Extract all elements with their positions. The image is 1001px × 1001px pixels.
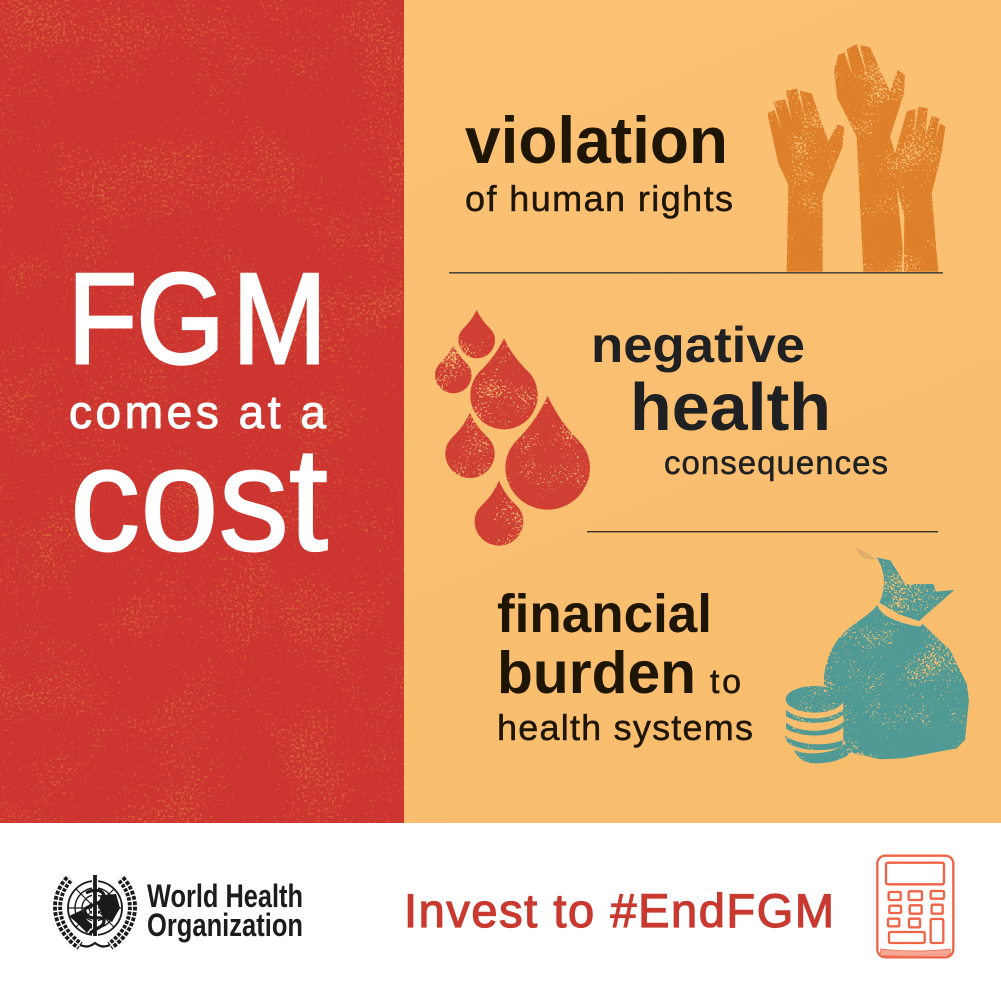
title: FGM comes at a cost: comes at a [69, 386, 326, 438]
logo: World Health Organization [58, 875, 303, 946]
panel: sand content panel [404, 0, 1001, 823]
panel: white footer [0, 823, 1001, 1001]
text: organisation name [147, 878, 303, 943]
icon: blood drops [435, 310, 590, 546]
text: negative health consequences [591, 317, 888, 481]
title: FGM comes at a cost [68, 246, 328, 582]
divider: top [449, 272, 943, 274]
text: negative health consequences: health [630, 370, 831, 445]
title: FGM comes at a cost: FGM [68, 246, 327, 391]
text: negative health consequences: consequences [664, 444, 888, 481]
text: violation of human rights [465, 103, 733, 219]
icon: raised hands [767, 44, 945, 272]
text: organisation name: Organization [147, 907, 303, 943]
panel: red title panel [0, 0, 404, 823]
text: financial burden to health systems: health systems [497, 707, 753, 748]
text: financial burden to health systems: to [710, 663, 741, 701]
text: organisation name: World Health [147, 878, 303, 914]
icon: calculator [877, 856, 953, 957]
divider: middle [587, 531, 938, 532]
text: negative health consequences: negative [591, 317, 805, 373]
title: FGM comes at a cost: cost [70, 417, 328, 582]
text: financial burden to health systems [497, 584, 753, 748]
text: financial burden to health systems: financial [497, 584, 712, 644]
icon: WHO emblem [58, 875, 132, 946]
text: financial burden to health systems: burden [497, 640, 696, 706]
text: campaign hashtag: Invest to #EndFGM [404, 884, 834, 937]
icon: money bag and coins [785, 547, 969, 763]
text: violation of human rights: of human rights [465, 178, 733, 219]
text: violation of human rights: violation [465, 103, 728, 177]
